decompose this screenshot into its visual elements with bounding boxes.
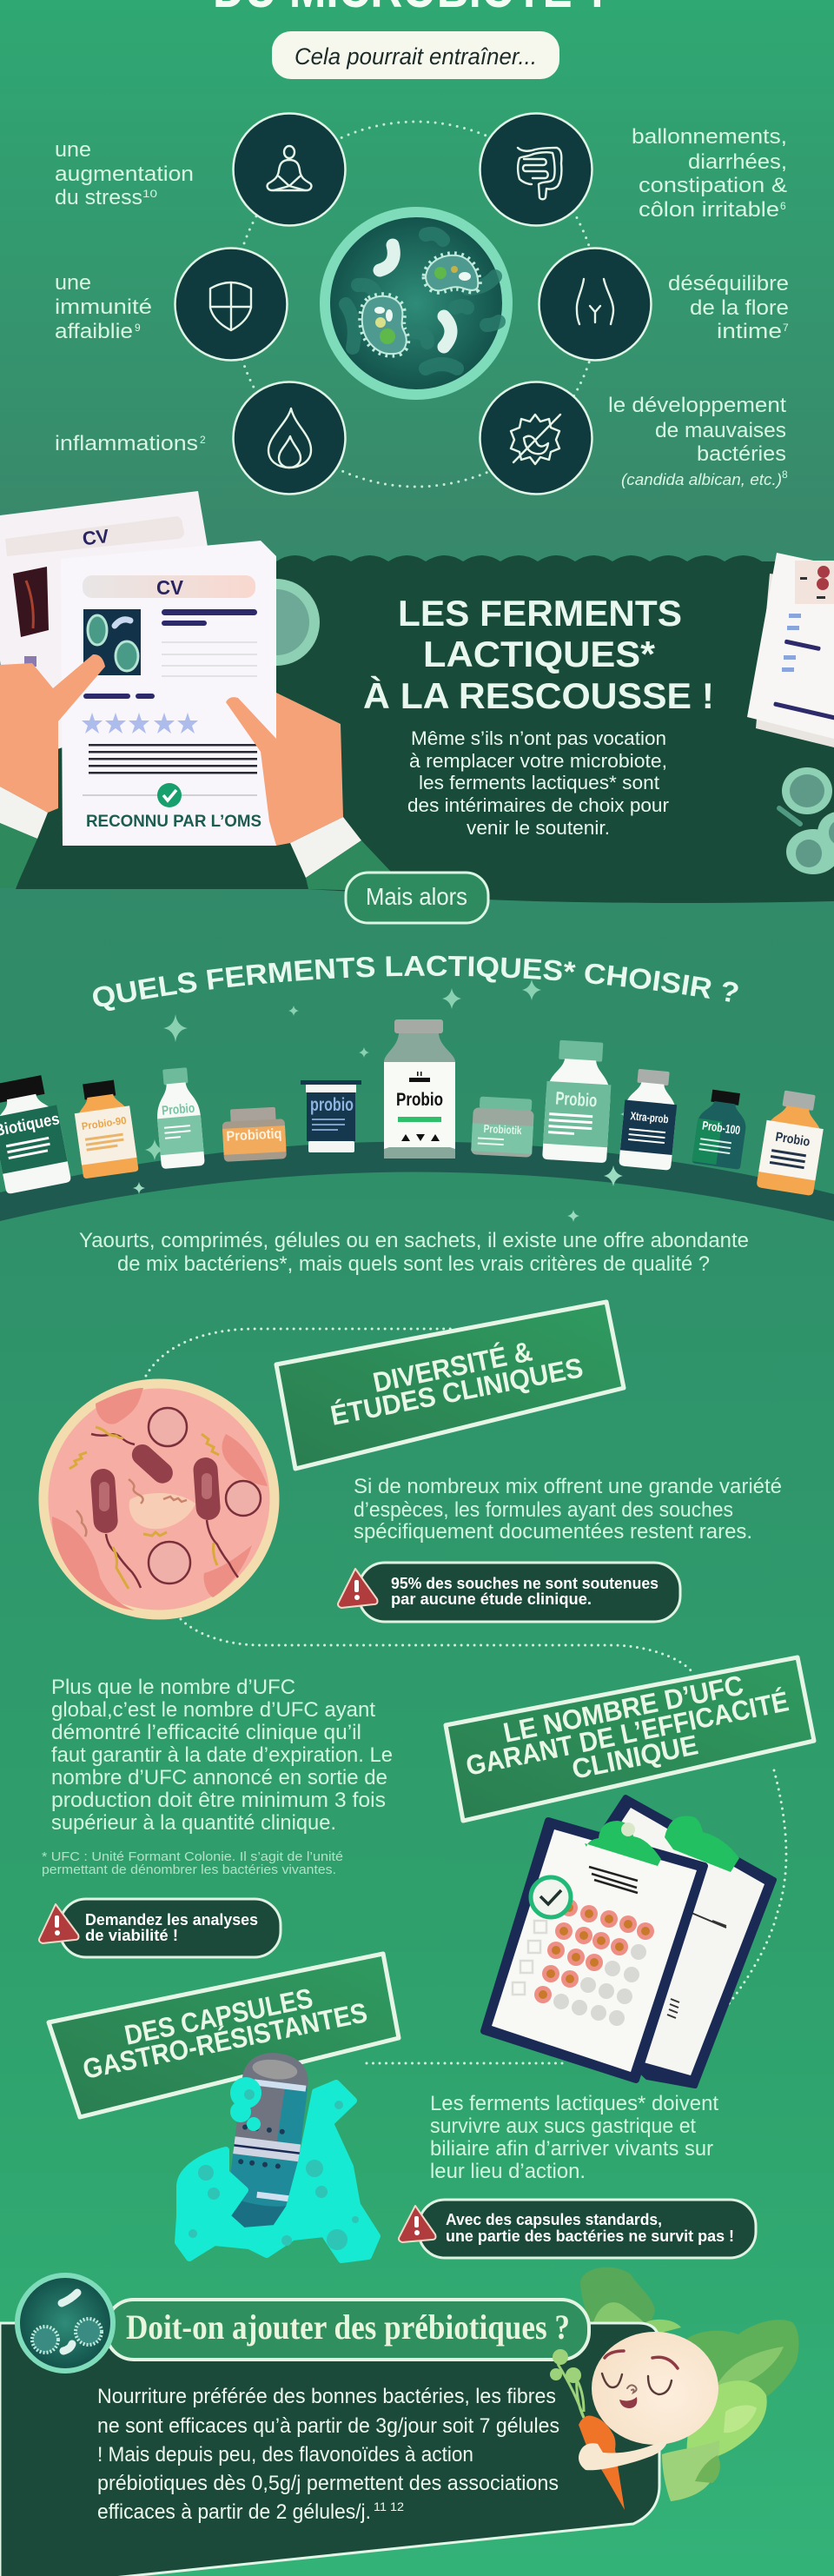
- bottle: xtra-prob: Xtra-prob: [630, 1109, 669, 1125]
- text: nourriture: ne sont efficaces qu’à partir de 3g/jour soit 7 gélules: [97, 2414, 559, 2438]
- text: plus que le nombre: Plus que le nombre d’UFC: [51, 1676, 295, 1699]
- face: [602, 2351, 678, 2394]
- text: plus que le nombre: faut garantir à la date d’expiration. Le: [51, 1743, 393, 1767]
- illustration: turnip character with carrot: [550, 2332, 718, 2510]
- icon: flame: [233, 382, 346, 494]
- text: les ferments doivent survivre: biliaire afin d’arriver vivants sur: [430, 2137, 713, 2161]
- text: si de nombreux: Si de nombreux mix offrent une grande variété: [354, 1475, 782, 1498]
- callout: analyses: de viabilité !: [85, 1927, 178, 1944]
- bottle: orange probio: [756, 1088, 829, 1196]
- label: ballonnements: diarrhées,: [688, 150, 787, 174]
- text: nourriture: ! Mais depuis peu, des flavonoïdes à action: [97, 2443, 473, 2466]
- bottle: big probio: Probio: [396, 1090, 443, 1110]
- illustration: back CV: [0, 491, 214, 765]
- cells: right: [779, 767, 834, 874]
- text: nourriture: 11 12: [374, 2500, 404, 2513]
- text: si de nombreux: [354, 1475, 782, 1544]
- label: mauvaises bactéries: de mauvaises: [655, 419, 786, 442]
- bottle: orange: [70, 1079, 139, 1178]
- label: ballonnements: 6: [780, 200, 786, 212]
- icon: check: [157, 783, 182, 807]
- pill: cela pourrait entraîner: [272, 31, 559, 79]
- text: nourriture: [97, 2385, 559, 2524]
- banner: nombre d'UFC: CLINIQUE: [569, 1729, 700, 1785]
- title: les ferments lactiques: À LA RESCOUSSE !: [363, 675, 714, 716]
- illustration: leaves: [580, 2267, 798, 2501]
- icon: shield: [175, 249, 287, 360]
- sparkles: below shelf: [133, 1165, 623, 1222]
- heading: quels ferments: QUELS FERMENTS LACTIQUES* CHOISIR ?: [93, 956, 738, 1011]
- illustration: front CV: RECONNU PAR L’OMS: [86, 813, 261, 831]
- text: même s'ils: des intérimaires de choix pour: [407, 794, 669, 816]
- illustration: left hand: [0, 654, 105, 888]
- jar: probiotiq: [222, 1106, 287, 1162]
- title: les ferments lactiques: LACTIQUES*: [423, 634, 656, 674]
- text: les ferments doivent survivre: Les ferments lactiques* doivent: [430, 2092, 718, 2115]
- callout: analyses: [39, 1899, 281, 1957]
- callout: capsules standards: une partie des bactéries ne survit pas !: [446, 2227, 734, 2245]
- illustration: front CV: [61, 541, 276, 846]
- bottle: big probio: [384, 1019, 455, 1159]
- arm: [579, 2442, 667, 2470]
- banner: diversité: [276, 1302, 624, 1469]
- banner: capsules: GASTRO-RÉSISTANTES: [80, 1996, 370, 2085]
- title pill: [106, 2300, 589, 2360]
- carrot leaves: [558, 2364, 584, 2418]
- cup: probio: probio: [310, 1095, 354, 1115]
- text: si de nombreux: d’espèces, les formules ayant des souches: [354, 1498, 733, 1522]
- pill: cela pourrait entraîner: Cela pourrait entraîner...: [295, 43, 537, 70]
- clipboard: front: [484, 1821, 705, 2080]
- acid blobs: [178, 2081, 377, 2260]
- text: même s'ils: Même s’ils n’ont pas vocation: [411, 727, 666, 749]
- bacteria: [70, 1408, 261, 1589]
- callout: 95%: [338, 1563, 680, 1622]
- illustration: back CV: CV: [81, 525, 110, 550]
- label: ballonnements: côlon irritable: [639, 198, 779, 222]
- footnote: ufc: * UFC : Unité Formant Colonie. Il s’agit de l’unité: [42, 1849, 343, 1864]
- label: flore intime: [668, 272, 789, 343]
- bottle: orange: Probio-90: [81, 1114, 128, 1132]
- text: yaourts: de mix bactériens*, mais quels sont les vrais critères de qualité ?: [117, 1252, 710, 1276]
- label: flore intime: 7: [783, 322, 789, 334]
- illustration: right CV: [747, 553, 834, 747]
- labels left: [55, 138, 206, 455]
- text: nourriture: Nourriture préférée des bonnes bactéries, les fibres: [97, 2385, 556, 2408]
- button: mais alors: [346, 873, 488, 923]
- products: bottles: [0, 1019, 829, 1196]
- capsule: [223, 2049, 313, 2240]
- panel: prébiotiques: [0, 2275, 659, 2576]
- text: même s'ils: à remplacer votre microbiote,: [409, 750, 667, 772]
- bottle: white and green: Probio: [162, 1101, 195, 1119]
- illustration: right hand: [226, 693, 401, 892]
- text: si de nombreux: spécifiquement documentées restent rares.: [354, 1520, 752, 1544]
- label: stress: augmentation: [55, 163, 194, 186]
- dotted path: connector: [146, 1329, 786, 2063]
- banner: nombre d'UFC: GARANT DE L’EFFICACITÉ: [463, 1685, 791, 1782]
- callout: capsules standards: Avec des capsules standards,: [446, 2211, 662, 2228]
- text: plus que le nombre: [51, 1676, 393, 1835]
- callout: 95%: par aucune étude clinique.: [391, 1590, 592, 1608]
- button: mais alors: Mais alors: [366, 883, 467, 910]
- icon: warning: [399, 2206, 436, 2242]
- jar: probiotiq: Probiotiq: [226, 1126, 282, 1145]
- label: stress: du stress: [55, 186, 142, 209]
- label: stress: 10: [142, 188, 157, 200]
- label: inflammations: 2: [200, 434, 206, 446]
- bottle: large green label: Probio: [555, 1089, 598, 1111]
- label: mauvaises bactéries: 8: [782, 468, 788, 481]
- bottle: xtra-prob: [619, 1068, 680, 1171]
- title pill: Doit-on ajouter des prébiotiques ?: [126, 2307, 570, 2347]
- jar: probiotik: Probiotik: [483, 1122, 523, 1137]
- text: plus que le nombre: production doit être minimum 3 fois: [51, 1789, 386, 1812]
- text: nourriture: efficaces à partir de 2 gélules/j.: [97, 2500, 371, 2524]
- icon: crossed-out bacteria: [480, 382, 592, 494]
- label: mauvaises bactéries: bactéries: [697, 442, 786, 466]
- label: immunité: [55, 271, 152, 343]
- label: mauvaises bactéries: le développement: [608, 394, 786, 417]
- label: immunité: 9: [135, 322, 141, 334]
- label: flore intime: intime: [717, 320, 782, 343]
- text: les ferments doivent survivre: survivre aux sucs gastrique et: [430, 2115, 696, 2138]
- footnote: ufc: permettant de dénombrer les bactéries vivantes.: [42, 1862, 336, 1877]
- bottle: prob-100: [692, 1088, 751, 1170]
- text: yaourts: [79, 1229, 749, 1276]
- text: plus que le nombre: supérieur à la quantité clinique.: [51, 1811, 336, 1835]
- grid of dots: [534, 1899, 654, 2003]
- text: plus que le nombre: global,c’est le nombre d’UFC ayant: [51, 1698, 375, 1722]
- text: les ferments doivent survivre: leur lieu d’action.: [430, 2160, 586, 2183]
- icon: warning: [338, 1569, 377, 1608]
- cell: left petri: [233, 579, 320, 666]
- callout: 95%: 95% des souches ne sont soutenues: [391, 1575, 659, 1592]
- label: flore intime: déséquilibre: [668, 272, 789, 295]
- diagram: consequences ring: [175, 113, 652, 494]
- text: même s'ils: venir le soutenir.: [467, 817, 610, 839]
- panel: les ferments à la rescousse: [0, 491, 834, 903]
- illustration: front CV: CV: [156, 576, 184, 599]
- title: les ferments lactiques: LES FERMENTS: [398, 593, 682, 634]
- bottle: white and green: [153, 1066, 205, 1169]
- bottle: biotiques: [0, 1073, 71, 1194]
- icon: validated check: [531, 1877, 571, 1917]
- callout: analyses: Demandez les analyses: [85, 1911, 258, 1929]
- turnip head: [592, 2332, 718, 2445]
- label: immunité: une: [55, 271, 91, 295]
- text: plus que le nombre: nombre d’UFC annoncé en sortie de: [51, 1766, 387, 1789]
- callout: capsules standards: [399, 2200, 756, 2258]
- icon: microbes: [17, 2275, 113, 2371]
- title: les ferments lactiques: [363, 593, 714, 716]
- banner: capsules: DES CAPSULES: [122, 1982, 315, 2051]
- label: immunité: affaiblie: [55, 320, 133, 343]
- bottle: orange probio: Probio: [774, 1130, 811, 1150]
- text: même s'ils: [407, 727, 669, 839]
- carrot: [579, 2415, 625, 2510]
- icon: meditation: [233, 113, 346, 226]
- illustration: capsule in acid: [178, 2049, 377, 2260]
- arc: shelf: [0, 1141, 834, 1221]
- footnote: ufc: [42, 1849, 343, 1877]
- label: stress: [55, 138, 194, 209]
- illustration: clipboards: [484, 1797, 774, 2086]
- label: immunité: immunité: [55, 295, 152, 319]
- text: les ferments doivent survivre: [430, 2092, 718, 2183]
- label: inflammations: inflammations: [55, 432, 198, 455]
- jar: probiotik: [471, 1096, 534, 1158]
- text: nourriture: prébiotiques dès 0,5g/j permettent des associations: [97, 2472, 559, 2495]
- icon: warning: [39, 1904, 78, 1943]
- text: plus que le nombre: démontré l’efficacité clinique qu’il: [51, 1721, 361, 1744]
- text: yaourts: Yaourts, comprimés, gélules ou en sachets, il existe une offre abondante: [79, 1229, 749, 1252]
- stars: [82, 713, 198, 734]
- cup: probio: [301, 1080, 361, 1152]
- clipboard: back: [521, 1797, 774, 2086]
- illustration: pink petri dish: [43, 1384, 275, 1615]
- labels right: [608, 125, 789, 488]
- icon: microbes circle: [325, 212, 507, 395]
- bottle: prob-100: Prob-100: [701, 1118, 741, 1137]
- label: mauvaises bactéries: [608, 394, 788, 488]
- label: stress: une: [55, 138, 91, 162]
- label: flore intime: de la flore: [690, 296, 789, 320]
- banner: diversité: DIVERSITÉ &: [370, 1335, 535, 1398]
- sparkles: [145, 979, 631, 1160]
- label: ballonnements: [632, 125, 787, 222]
- banner: nombre d'UFC: [446, 1657, 814, 1821]
- icon: intestine: [480, 113, 592, 226]
- label: mauvaises bactéries: (candida albican, etc.): [621, 471, 782, 488]
- banner: diversité: ÉTUDES CLINIQUES: [328, 1351, 586, 1431]
- banner: nombre d'UFC: LE NOMBRE D’UFC: [500, 1670, 746, 1749]
- bottle: large green label: [542, 1039, 613, 1163]
- icon: intimate flora: [539, 249, 652, 360]
- text: même s'ils: les ferments lactiques* sont: [419, 772, 659, 793]
- banner: capsules: [49, 1954, 399, 2117]
- label: ballonnements: constipation &: [639, 174, 787, 197]
- label: ballonnements: ballonnements,: [632, 125, 787, 149]
